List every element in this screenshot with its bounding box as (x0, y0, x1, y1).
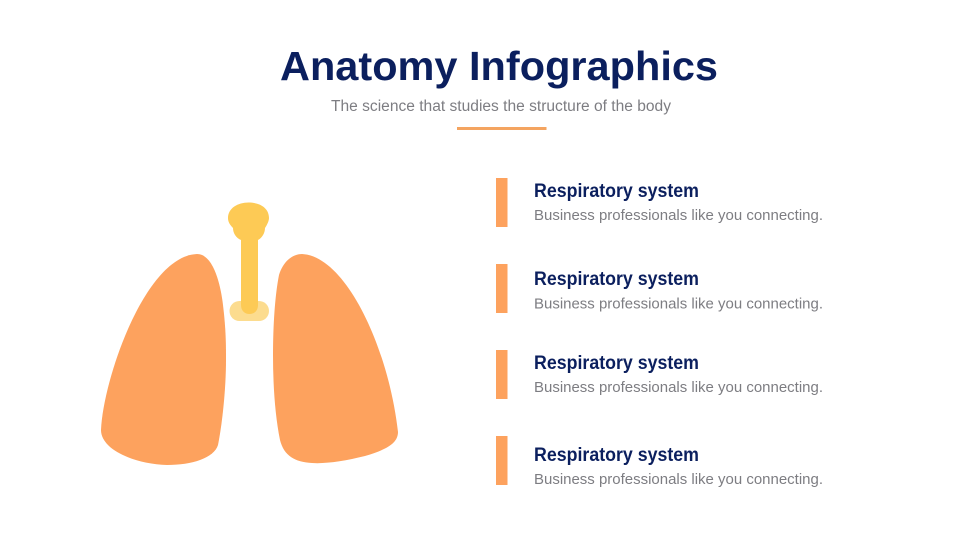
title: Anatomy Infographics (280, 43, 718, 89)
heading: Respiratory system (534, 445, 699, 466)
trachea (228, 202, 269, 314)
description: Business professionals like you connecting. (534, 379, 823, 396)
heading: Respiratory system (534, 181, 699, 202)
item 2 (496, 264, 823, 313)
trachea base (230, 301, 269, 321)
marker (496, 350, 508, 399)
description: Business professionals like you connecting. (534, 471, 823, 488)
accent rule (457, 127, 546, 130)
marker (496, 436, 508, 485)
marker (496, 264, 508, 313)
heading: Respiratory system (534, 269, 699, 290)
heading: Respiratory system (534, 353, 699, 374)
description: Business professionals like you connecting. (534, 296, 823, 312)
description: Business professionals like you connecting. (534, 207, 823, 224)
item 3 (496, 350, 823, 399)
left lung (101, 254, 226, 465)
item 1 (496, 178, 823, 227)
item 4 (496, 436, 823, 488)
icon: lungs and trachea (101, 202, 398, 465)
subtitle: The science that studies the structure of the body (331, 98, 671, 115)
marker (496, 178, 508, 227)
right lung (273, 254, 398, 463)
